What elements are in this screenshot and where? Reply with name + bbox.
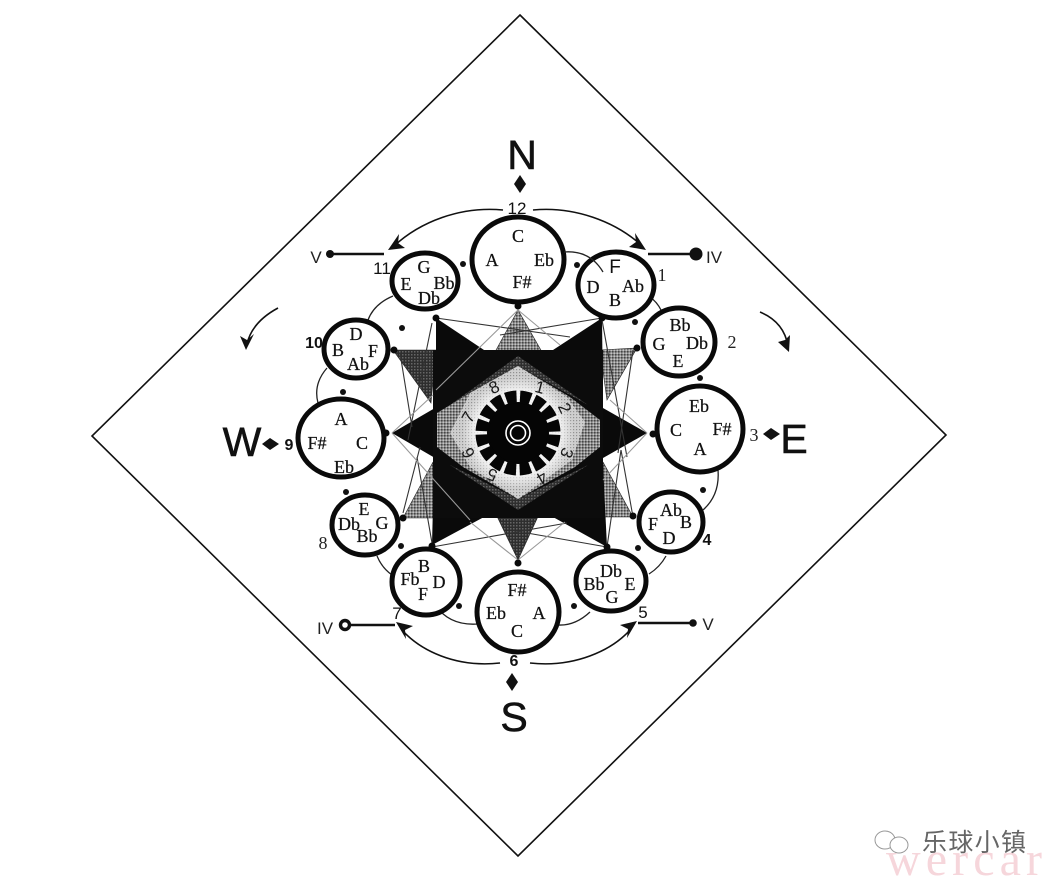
position numbers: 6 [510, 653, 519, 670]
circle 4: Ab [660, 500, 682, 520]
circle 11: Db [418, 288, 440, 308]
circle 1: F [609, 257, 621, 278]
circle 11 [392, 253, 458, 309]
white disc [462, 377, 574, 489]
circle 1: D [586, 277, 600, 297]
compass east: E [780, 416, 808, 462]
circle 6 [477, 572, 559, 652]
inner ring numbers: 5 [484, 464, 500, 485]
circle 2: Db [686, 333, 708, 353]
circle 12 [472, 217, 564, 302]
circle 8 [332, 495, 398, 555]
circle 3: C [670, 420, 682, 440]
circle 4: D [662, 528, 676, 548]
position numbers [285, 199, 758, 670]
circle 9: C [356, 433, 368, 453]
inner ring numbers: 7 [458, 408, 479, 426]
circle 7: F [418, 584, 428, 604]
circle 12: F# [512, 272, 532, 292]
circle 3: F# [712, 419, 732, 439]
inner ring numbers: 1 [533, 377, 547, 398]
watermark: chinese name: 乐球小镇 [922, 829, 1026, 857]
arrow: 12 to 1 with IV marker [533, 209, 723, 267]
circle 2 [643, 308, 715, 376]
position numbers: 9 [285, 437, 294, 454]
circle 1 [564, 252, 654, 318]
circle 10: B [332, 340, 344, 360]
criss-cross thin lines [392, 310, 647, 560]
circle 5: Bb [583, 574, 605, 594]
star: mid-grey band top [450, 356, 588, 405]
circle 9 [298, 399, 384, 477]
compass west: W [223, 419, 262, 465]
star: light inner shape [450, 366, 585, 499]
circle 6: Eb [486, 603, 506, 623]
circle 10: Ab [347, 354, 369, 374]
circle 3: Eb [689, 396, 709, 416]
arrow: 12 to 1 with IV marker: IV [706, 248, 723, 267]
connecting arcs between circles [317, 296, 718, 625]
circle 4: B [680, 512, 692, 532]
watermark: wechat icon [875, 831, 908, 853]
circle 7: D [432, 572, 446, 592]
star: dark points [392, 318, 647, 547]
circle 1: B [609, 290, 621, 310]
position numbers: 10 [305, 335, 323, 352]
central star figure [382, 302, 656, 566]
circle 5: G [606, 587, 618, 607]
inner ring numbers: 6 [458, 444, 479, 461]
arrow: 6 to 5 with V marker: V [702, 615, 714, 634]
star: central dark block [433, 350, 603, 518]
diamond frame [92, 15, 946, 856]
circle 11: G [418, 257, 430, 277]
circle 12: C [512, 226, 524, 246]
arrow: 12 to 11 with V marker [310, 209, 503, 267]
circle 6: F# [507, 580, 527, 600]
circle 8: G [376, 513, 388, 533]
rotation arrow left [240, 308, 278, 350]
circle 2: E [672, 351, 684, 371]
position numbers: 7 [392, 604, 402, 623]
gear wheel [482, 397, 554, 469]
position numbers: 1 [658, 265, 666, 285]
circle 1: Ab [622, 276, 644, 296]
star: mid-grey band bottom [450, 465, 588, 510]
position numbers: 2 [728, 332, 736, 352]
circle 7: Fb [400, 569, 420, 589]
arrow: 6 to 7 with IV marker: IV [317, 619, 334, 638]
arrow: 6 to 7 with IV marker [317, 619, 500, 664]
circle 7 [392, 549, 460, 615]
circle 2: Bb [669, 315, 691, 335]
circle 12: Eb [534, 250, 554, 270]
inner ring numbers: 8 [486, 377, 503, 398]
star: grey octagon [437, 366, 600, 499]
arrow: 12 to 11 with V marker: V [310, 248, 322, 267]
small black dots between circles [340, 261, 706, 609]
circle 3: A [694, 439, 706, 459]
circle 4: F [648, 514, 658, 534]
compass south: S [500, 694, 528, 740]
circle 5: E [624, 574, 636, 594]
circle 5: Db [600, 561, 622, 581]
circle 8: E [358, 499, 370, 519]
rotation arrow right [760, 312, 790, 352]
star: grey points [393, 310, 637, 560]
position numbers: 3 [750, 425, 758, 445]
circle 8: Db [338, 514, 360, 534]
inner ring numbers: 4 [533, 467, 551, 488]
circle 9: F# [307, 433, 327, 453]
compass east [763, 416, 808, 462]
circle 9: A [334, 409, 348, 429]
circle 5 [576, 551, 646, 611]
compass south [500, 673, 528, 740]
watermark: pink wercar: wercar [886, 833, 1042, 886]
circle 10: D [350, 324, 362, 344]
inner ring numbers [458, 377, 577, 488]
compass north: N [507, 132, 537, 178]
circle 2: G [652, 334, 666, 354]
position numbers: 8 [318, 533, 328, 553]
circle 9: Eb [334, 457, 354, 477]
circle 6: C [511, 621, 523, 641]
position numbers: 12 [508, 199, 526, 218]
circle 3 [657, 386, 743, 472]
circle 10: F [368, 341, 378, 361]
circle 6: A [532, 603, 546, 623]
compass west [223, 419, 279, 465]
circle 12: A [486, 250, 498, 270]
inner ring numbers: 3 [556, 445, 577, 461]
circle 4 [639, 492, 703, 552]
circle 7: B [418, 556, 430, 576]
circle 11: E [400, 274, 412, 294]
circle 10 [324, 320, 388, 378]
circle 8: Bb [356, 526, 378, 546]
position numbers: 11 [373, 259, 391, 278]
arrow: 6 to 5 with V marker [530, 615, 714, 664]
position numbers: 5 [638, 603, 648, 622]
inner ring numbers: 2 [554, 400, 575, 417]
position numbers: 4 [703, 532, 712, 549]
circle 11: Bb [433, 273, 455, 293]
star tip dots [382, 302, 656, 566]
